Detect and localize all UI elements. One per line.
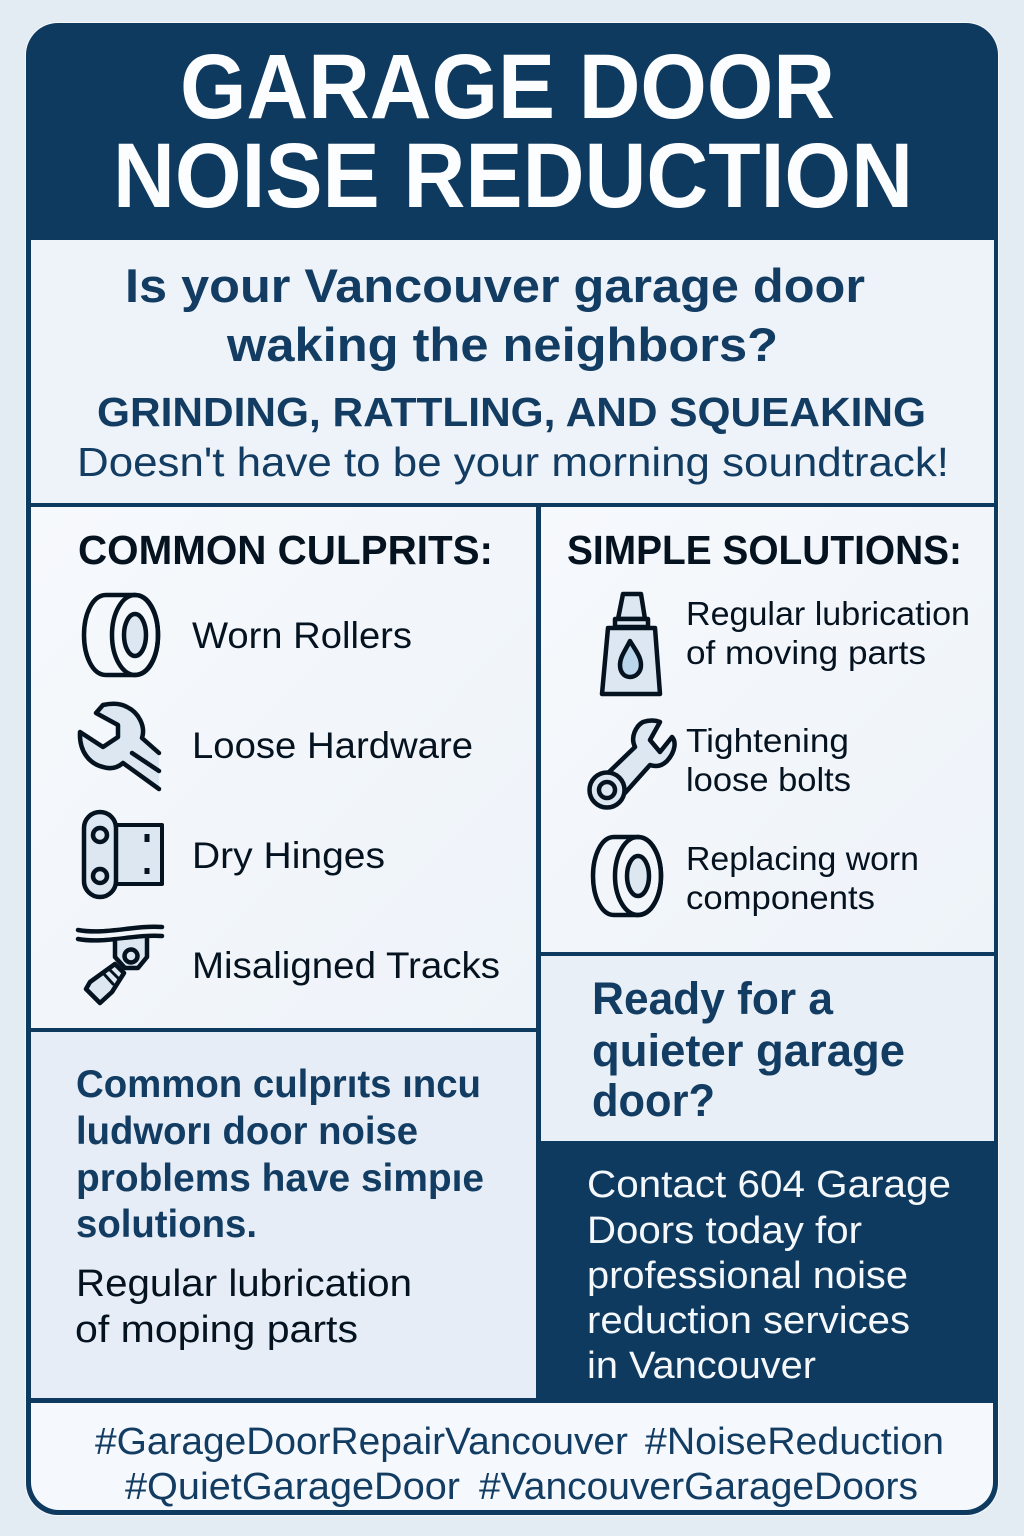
icon: spanner — [590, 720, 675, 808]
solution 1 text: Regular lubrication — [686, 595, 970, 632]
solution 2 text — [686, 722, 851, 798]
panel: contact: Contact 604 Garage — [587, 1164, 951, 1206]
panel: common culprits — [31, 507, 536, 1028]
intro question: waking the neighbors? — [226, 318, 778, 371]
icon: lubricant bottle — [602, 594, 660, 694]
panel: hashtags: #NoiseReduction — [645, 1421, 944, 1463]
panel: contact: Doors today for — [587, 1210, 862, 1252]
title: NOISE REDUCTION — [113, 125, 913, 227]
solution 1 text: of moving parts — [686, 634, 926, 671]
intro tagline: Doesn't have to be your morning soundtrack! — [77, 439, 949, 485]
label: loose hardware: Loose Hardware — [192, 725, 473, 766]
panel: call to action question — [541, 956, 994, 1141]
panel: hashtags: #QuietGarageDoor — [125, 1466, 460, 1508]
title — [113, 36, 913, 227]
summary bold text: Common culprıts ıncu — [76, 1063, 481, 1106]
solution 2 text: Tightening — [686, 722, 849, 759]
culprits heading: COMMON CULPRITS: — [78, 527, 493, 573]
panel: hashtags — [31, 1403, 993, 1510]
panel: call to action question: Ready for a — [592, 973, 834, 1024]
summary bold text: problems have simpıe — [76, 1157, 484, 1200]
panel: call to action question: door? — [592, 1075, 715, 1126]
panel: contact: in Vancouver — [587, 1345, 816, 1387]
panel: simple solutions — [541, 507, 994, 952]
solution 3 text — [686, 840, 919, 916]
summary bold text: solutions. — [76, 1203, 257, 1246]
panel: intro — [31, 240, 994, 503]
intro question — [125, 259, 865, 371]
intro noise heading: GRINDING, RATTLING, AND SQUEAKING — [97, 389, 926, 435]
icon: misaligned track — [78, 927, 162, 1003]
icon: roller — [84, 595, 158, 675]
solution 3 text: components — [686, 879, 875, 916]
panel: hashtags: #GarageDoorRepairVancouver — [95, 1421, 628, 1463]
panel: contact: professional noise — [587, 1255, 908, 1297]
solution 3 text: Replacing worn — [686, 840, 919, 877]
panel: contact: reduction services — [587, 1300, 910, 1342]
icon: wrench — [80, 704, 159, 789]
intro question: Is your Vancouver garage door — [125, 259, 865, 312]
title: GARAGE DOOR — [180, 36, 835, 138]
panel: summary — [31, 1032, 536, 1398]
panel: contact — [587, 1164, 951, 1387]
icon: replacement roller — [593, 837, 661, 915]
label: misaligned tracks: Misaligned Tracks — [192, 945, 500, 986]
summary bold text — [76, 1063, 484, 1246]
panel: call to action question: quieter garage — [592, 1025, 905, 1076]
solution 1 text — [686, 595, 970, 671]
summary bold text: ludworı door noise — [76, 1110, 418, 1153]
icon: hinge — [84, 812, 162, 897]
solutions heading: SIMPLE SOLUTIONS: — [567, 527, 962, 573]
label: dry hinges: Dry Hinges — [192, 835, 385, 876]
panel: hashtags: #VancouverGarageDoors — [479, 1466, 918, 1508]
summary note — [75, 1263, 412, 1351]
label: worn rollers: Worn Rollers — [192, 615, 412, 656]
summary note: of moping parts — [75, 1309, 358, 1351]
summary note: Regular lubrication — [76, 1263, 412, 1305]
solution 2 text: loose bolts — [686, 761, 851, 798]
